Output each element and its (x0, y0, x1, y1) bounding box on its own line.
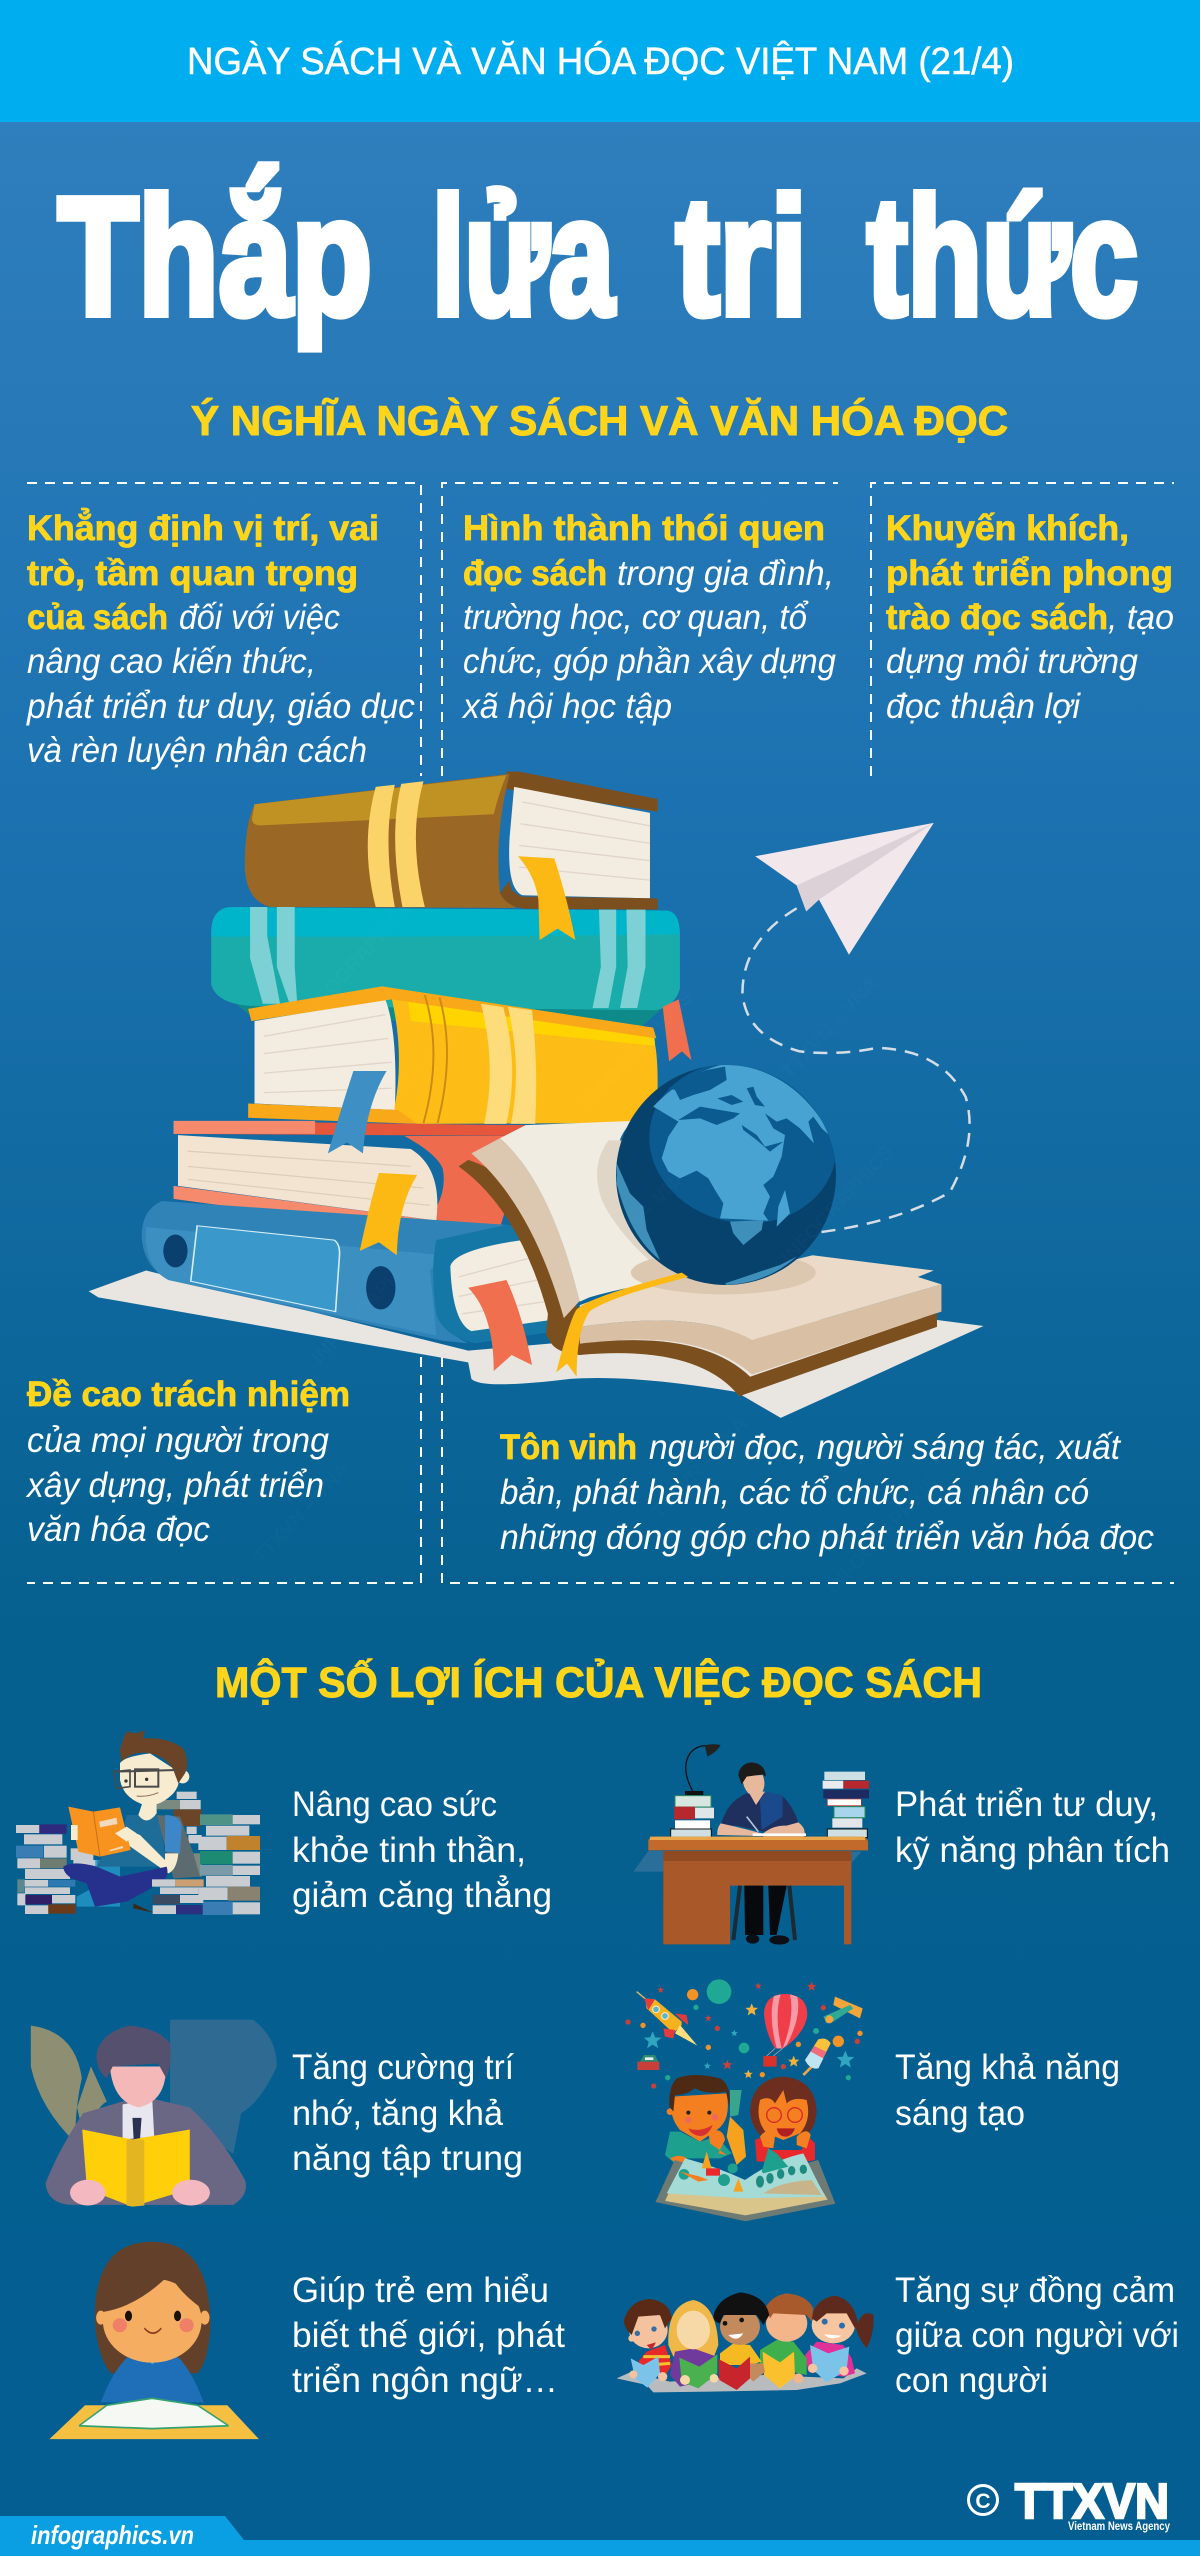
icon: man with yellow book (31, 2020, 277, 2207)
text block: reading habits: trong gia đình, (617, 554, 834, 593)
footer bar (0, 2516, 1200, 2556)
child 1 (624, 2299, 672, 2388)
heading: meaning: Ý NGHĨA NGÀY SÁCH VÀ VĂN HÓA ĐỌC (191, 396, 1008, 444)
top banner: NGÀY SÁCH VÀ VĂN HÓA ĐỌC VIỆT NAM (21/4) (187, 40, 1014, 83)
icon: children imagining over a pop-up book (625, 1979, 863, 2221)
book: blue binder (142, 1201, 564, 1343)
icon: group of children reading (617, 2292, 874, 2392)
text block: affirm role of books: và rèn luyện nhân cách (27, 731, 367, 770)
logo: TTXVN: C (975, 2490, 991, 2513)
text block: reading movement: trào đọc sách (886, 598, 1108, 637)
page canvas: TTXVN – VNA (778, 973, 882, 1083)
girl (750, 2077, 817, 2162)
bookmark: yellow lower (360, 1173, 417, 1255)
heading: benefits: MỘT SỐ LỢI ÍCH CỦA VIỆC ĐỌC SÁCH (215, 1658, 982, 1707)
page canvas: INFOGRAPHICS (308, 1241, 428, 1368)
pop-up book base (655, 2160, 835, 2221)
bookmark: yellow top (518, 856, 575, 940)
text block: reading habits: Hình thành thói quen (463, 509, 825, 548)
page canvas: INFOGRAPHICS (578, 986, 698, 1113)
text block: affirm role of books: Khẳng định vị trí, vai (27, 508, 379, 548)
text block: reading movement (886, 509, 1174, 726)
icon: man writing at desk (633, 1744, 869, 1945)
logo: TTXVN: Vietnam News Agency (1068, 2519, 1170, 2533)
text block: honour readers: những đóng góp cho phát triển văn hóa đọc (500, 1518, 1154, 1557)
text block: affirm role of books: nâng cao kiến thức, (27, 642, 316, 681)
title: lửa (432, 164, 615, 350)
title: Thắp (58, 164, 372, 350)
book: coral (174, 1121, 529, 1232)
popsicle (803, 2039, 831, 2075)
text block: reading habits: đọc sách (463, 554, 607, 593)
text block: affirm role of books (26, 508, 415, 770)
book: teal (211, 907, 680, 1028)
bookmark: blue (328, 1071, 387, 1153)
benefit text 6: Tăng sự đồng cảm (895, 2271, 1175, 2310)
text block: reading movement: , tạo (1108, 598, 1174, 637)
book stack (89, 772, 984, 1418)
benefit text 6: giữa con người với (895, 2316, 1179, 2355)
text block: raise responsibility: văn hóa đọc (27, 1510, 210, 1549)
bookmark: coral lower (468, 1280, 532, 1371)
benefit text 5: sáng tạo (895, 2094, 1025, 2133)
book: brown (245, 772, 658, 910)
text block: honour readers: bản, phát hành, các tổ chức, cá nhân có (500, 1473, 1089, 1512)
page canvas: INFOGRAPHICS (778, 1141, 898, 1268)
benefit text 6: con người (895, 2361, 1048, 2400)
text block: reading movement: dựng môi trường (886, 642, 1139, 681)
logo: TTXVN (968, 2475, 1170, 2533)
benefit text 6 (895, 2271, 1179, 2400)
icon: paper plane (755, 823, 934, 955)
benefit text 5: Tăng khả năng (895, 2048, 1120, 2087)
text block: reading habits: xã hội học tập (461, 687, 672, 726)
benefit text 2 (292, 2048, 523, 2178)
text block: affirm role of books: của sách (27, 598, 168, 637)
footer bar: infographics.vn (31, 2520, 194, 2550)
planet (707, 1979, 731, 2004)
text block: reading movement: phát triển phong (886, 554, 1173, 593)
benefit text 4: kỹ năng phân tích (895, 1831, 1170, 1870)
illustration: books, globe and paper plane (89, 772, 984, 1418)
title: tri (676, 164, 807, 350)
ribbon (556, 1273, 688, 1377)
benefit text 4: Phát triển tư duy, (895, 1785, 1158, 1824)
open book (459, 1121, 941, 1396)
paper base (89, 1270, 984, 1418)
benefit text 4 (895, 1785, 1170, 1870)
benefit text 1: Nâng cao sức (292, 1785, 497, 1824)
icon: girl reading (49, 2242, 259, 2439)
text block: honour readers (500, 1428, 1154, 1557)
stars and dots (625, 1982, 863, 2089)
text block: reading movement: Khuyến khích, (886, 509, 1129, 548)
biplane (823, 1997, 863, 2023)
page canvas: TTXVN – VNA (648, 1413, 752, 1523)
text block: raise responsibility: của mọi người trong (27, 1421, 330, 1460)
text block: affirm role of books: phát triển tư duy, giáo dục (26, 687, 415, 726)
child 2 (668, 2300, 718, 2388)
top banner (0, 0, 1200, 122)
text block: honour readers: người đọc, người sáng tác, xuất (649, 1428, 1121, 1467)
text block: raise responsibility: xây dựng, phát triển (25, 1466, 324, 1505)
page canvas: INFOGRAPHICS (298, 896, 418, 1023)
benefit text 1: giảm căng thẳng (292, 1875, 552, 1915)
text block: honour readers: Tôn vinh (500, 1428, 637, 1467)
page canvas: TTXVN – VNA (588, 1163, 692, 1273)
benefit text 3: biết thế giới, phát (292, 2316, 565, 2355)
text block: affirm role of books: đối với việc (179, 598, 340, 637)
benefit text 1: khỏe tinh thần, (292, 1831, 526, 1870)
text block: reading habits (461, 509, 836, 726)
rocket (637, 1992, 697, 2046)
benefit text 3 (292, 2271, 565, 2400)
arrow: dashed flight path (742, 908, 970, 1232)
benefit text 3: Giúp trẻ em hiểu (292, 2271, 549, 2310)
page canvas: TTXVN – VNA (358, 1023, 462, 1133)
child 5 (805, 2296, 874, 2382)
child 4 (760, 2293, 813, 2388)
balloon (763, 1994, 807, 2067)
benefit text 2: năng tập trung (292, 2139, 523, 2178)
title (58, 164, 1138, 350)
book: yellow (248, 986, 658, 1124)
globe (616, 1065, 836, 1285)
text block: reading habits: chức, góp phần xây dựng (463, 642, 836, 681)
text block: raise responsibility (25, 1375, 350, 1549)
icon: student reading on books (16, 1730, 260, 1915)
logo: TTXVN: TTXVN (1015, 2475, 1169, 2529)
boy (665, 2075, 746, 2182)
benefit text 2: Tăng cường trí (292, 2048, 514, 2087)
benefit text 2: nhớ, tăng khả (292, 2094, 504, 2133)
benefit text 3: triển ngôn ngữ… (292, 2361, 558, 2400)
text block: affirm role of books: trò, tầm quan trọng (27, 554, 358, 593)
bookmark: coral right (663, 999, 691, 1061)
benefit text 1 (292, 1785, 552, 1915)
text block: reading movement: đọc thuận lợi (886, 687, 1081, 726)
page canvas: INFOGRAPHICS (823, 1471, 943, 1598)
text block: reading habits: trường học, cơ quan, tổ (463, 598, 809, 637)
text block: raise responsibility: Đề cao trách nhiệm (27, 1375, 350, 1414)
ribbon, plane and flight path (556, 823, 970, 1377)
child 3 (713, 2292, 769, 2390)
page canvas: TTXVN – VNA (250, 1458, 354, 1568)
car (637, 2055, 659, 2070)
benefit text 5 (895, 2048, 1120, 2133)
pop-up book pages (667, 2148, 825, 2198)
